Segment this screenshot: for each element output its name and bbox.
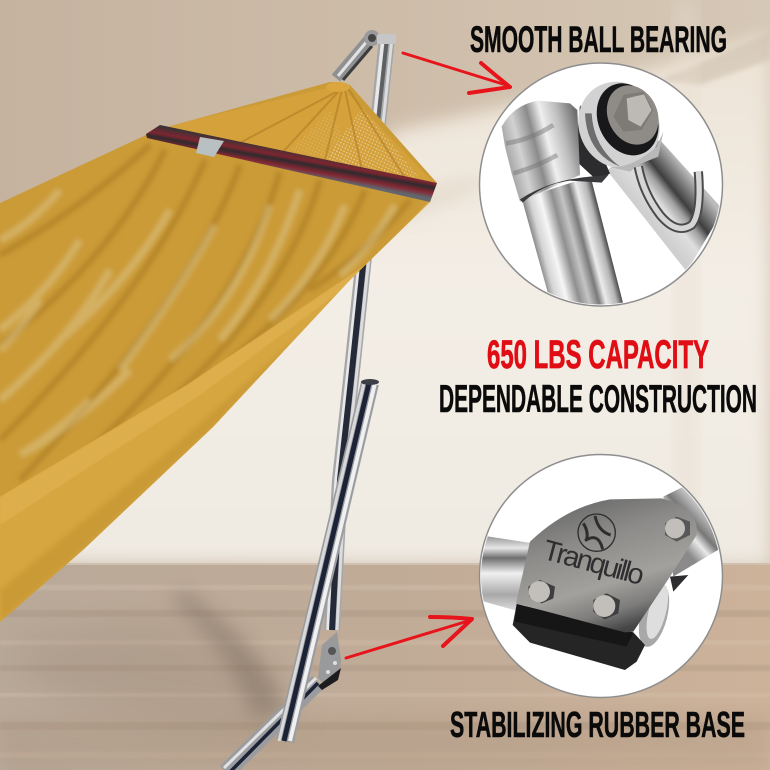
bolts xyxy=(528,517,690,619)
main pole xyxy=(328,34,396,630)
horizontal tube xyxy=(481,536,530,610)
circle detail: ball bearing and hook xyxy=(480,63,723,307)
hammock xyxy=(0,82,437,622)
hammock stand frame xyxy=(224,30,396,770)
upper mesh xyxy=(325,108,420,178)
top hook arm xyxy=(336,30,380,80)
circle detail: rubber base xyxy=(478,454,723,698)
background: beige wall xyxy=(0,0,770,565)
top red arrow xyxy=(403,53,510,93)
bearing eye xyxy=(578,82,664,172)
wooden floor xyxy=(0,563,770,770)
hammock fabric folds and mesh xyxy=(0,85,437,622)
hook xyxy=(638,167,699,228)
light mesh streaks xyxy=(0,190,395,455)
bottom red arrow xyxy=(346,617,472,658)
front support tube xyxy=(279,379,379,741)
angled tube xyxy=(663,488,718,576)
logo emblem xyxy=(578,514,615,551)
wheel xyxy=(638,575,688,647)
hammock woven band xyxy=(146,125,437,202)
stainless plate xyxy=(516,498,697,632)
right tube xyxy=(607,140,723,272)
rubber foot xyxy=(513,604,645,670)
dark folds xyxy=(0,145,410,480)
ribbed collar xyxy=(502,101,610,203)
base tube xyxy=(224,678,318,770)
left main tube xyxy=(522,177,624,307)
brand text: Tranquillo xyxy=(540,534,648,592)
hem fold xyxy=(0,192,437,622)
base bracket xyxy=(318,632,341,690)
